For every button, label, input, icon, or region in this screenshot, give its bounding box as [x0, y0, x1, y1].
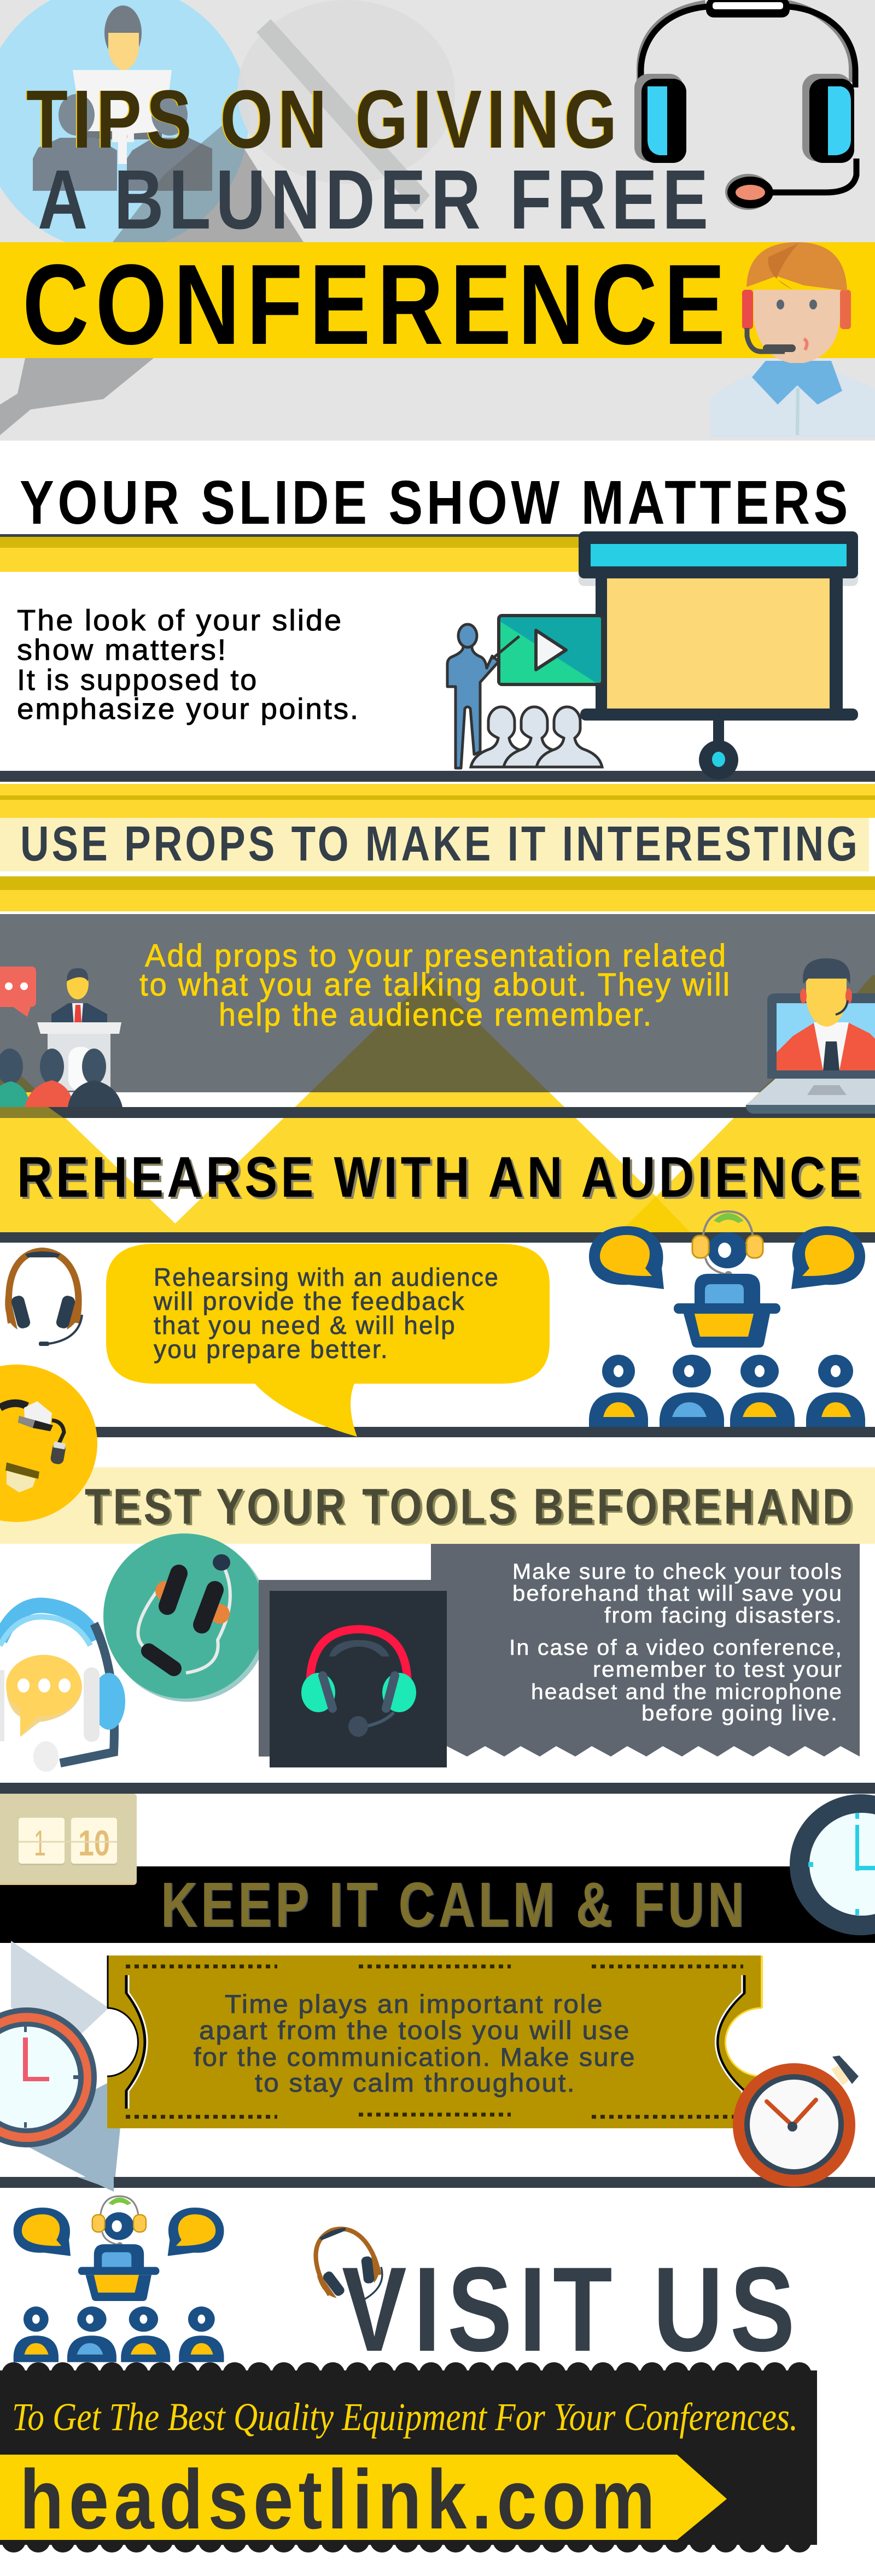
icon: flip clock card: 1	[34, 1823, 46, 1863]
text: slide show paragraph: show matters!	[17, 634, 228, 666]
icon: green disc with earphones	[103, 1533, 269, 1702]
panel: call to action	[0, 2370, 817, 2546]
icon: speaker and audience, blue	[589, 1211, 865, 1427]
panel: ticket with text: to stay calm throughout.	[255, 2068, 576, 2097]
speech bubble with text: you prepare better.	[154, 1335, 389, 1363]
gray panel with text: Add props to your presentation related	[145, 938, 727, 974]
icon: brown headset over heading	[303, 2218, 390, 2312]
icon: projector screen	[579, 531, 858, 780]
icon: wall clock right	[790, 1794, 875, 1935]
section: visit us	[0, 2196, 817, 2546]
card: dark headset icon	[259, 1580, 447, 1767]
title: tips on giving: TIPS ON GIVING	[26, 73, 622, 165]
panel: ticket with text: Time plays an important role	[225, 1989, 604, 2018]
title: a blunder free: A BLUNDER FREE	[38, 153, 713, 247]
icon: video call on laptop	[746, 958, 875, 1114]
header panel	[0, 0, 875, 441]
icon: clock left	[0, 2007, 97, 2147]
icon: support agent	[710, 242, 875, 437]
icon: presenter with slide and audience	[447, 616, 603, 768]
icon: speaker with audience in blue circle	[0, 0, 249, 251]
section: keep it calm	[0, 1794, 875, 2192]
panel: check tools text: In case of a video conference,	[509, 1636, 843, 1660]
background microphone silhouette	[0, 0, 455, 435]
icon: brown headset	[5, 1251, 82, 1346]
panel: check tools text	[431, 1544, 860, 1757]
panel: check tools text: before going live.	[641, 1701, 838, 1725]
icon: flip clock card	[0, 1794, 137, 1885]
icon: speaker and audience, small	[14, 2196, 224, 2362]
section: rehearse with an audience	[0, 1145, 875, 1437]
panel: ticket with text	[107, 1956, 762, 2128]
speech bubble with text	[106, 1244, 550, 1437]
gray panel with text	[0, 914, 875, 1092]
section: test your tools	[0, 1365, 875, 1772]
text: slide show paragraph: The look of your slide	[17, 604, 343, 637]
panel: check tools text: remember to test your	[593, 1658, 843, 1682]
panel: check tools text: from facing disasters.	[604, 1603, 843, 1627]
icon: flip clock card: 10	[78, 1823, 110, 1863]
panel: ticket with text: apart from the tools you will use	[199, 2016, 631, 2045]
icon: yellow circle with headset	[0, 1365, 97, 1522]
yellow triangles backdrop	[0, 975, 875, 1232]
heading: test your tools beforehand	[0, 1365, 875, 1544]
section: use props	[0, 817, 875, 1232]
panel: check tools text: beforehand that will save you	[512, 1582, 843, 1606]
text: slide show paragraph: emphasize your points.	[17, 693, 360, 725]
text: slide show paragraph	[17, 604, 360, 725]
speech bubble with text: that you need & will help	[154, 1311, 456, 1339]
icon: speaker at podium with audience	[0, 967, 122, 1107]
panel: check tools text: headset and the microphone	[531, 1680, 843, 1704]
icon: stopwatch right	[733, 2056, 859, 2187]
speech bubble with text: Rehearsing with an audience	[154, 1263, 499, 1291]
blue light beams	[0, 1941, 126, 2192]
icon: blue headset with chat bubble	[0, 1605, 125, 1772]
arrow with url: headsetlink.com	[20, 2452, 660, 2546]
panel: check tools text: Make sure to check your tools	[512, 1560, 843, 1584]
title: tips on giving: TIPS ON GIVING	[25, 73, 621, 165]
gray panel with text: to what you are talking about. They will	[139, 967, 731, 1003]
section: your slide show matters	[0, 468, 875, 782]
panel: ticket with text: for the communication. Make sure	[194, 2042, 636, 2071]
text: slide show paragraph: It is supposed to	[17, 664, 258, 696]
icon: black headset	[634, 0, 856, 210]
speech bubble with text: will provide the feedback	[153, 1287, 465, 1315]
gray panel with text: help the audience remember.	[219, 997, 653, 1033]
